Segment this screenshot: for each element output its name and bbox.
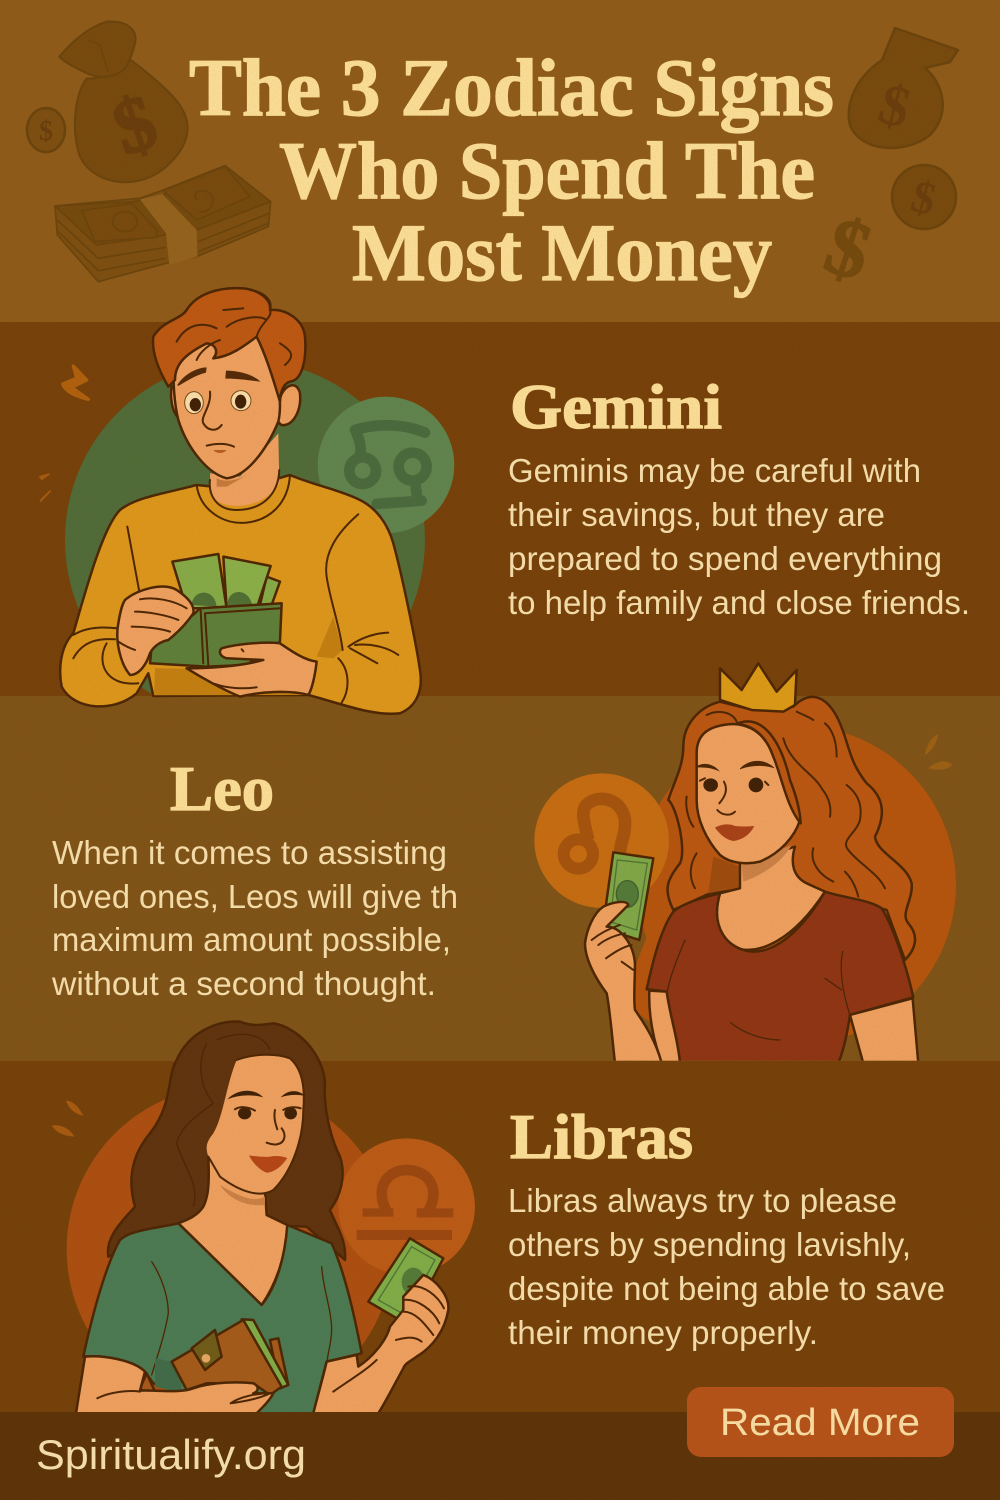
hair (153, 288, 305, 402)
line: Geminis may be careful with (508, 452, 921, 489)
lips (249, 1155, 287, 1173)
hair strands (177, 290, 291, 365)
hair strands (686, 712, 885, 897)
right arm (850, 998, 918, 1063)
panel: gemini (40, 288, 970, 720)
neck (210, 433, 279, 506)
footer brand: Spiritualify.org (36, 1431, 306, 1478)
icon: coin (892, 165, 956, 229)
neck and chest (178, 1158, 287, 1305)
libras text (508, 1182, 945, 1351)
title line 2: Who Spend The (279, 125, 815, 216)
collar (197, 470, 290, 523)
nose (267, 1110, 284, 1144)
icon: money bag (59, 21, 188, 182)
background doodles: money right (815, 28, 958, 298)
icon: money bag (849, 28, 958, 148)
right hand (187, 643, 317, 697)
line: without a second thought. (51, 965, 436, 1002)
hair (668, 697, 915, 960)
illustration: woman with wallet and bill (52, 1021, 475, 1413)
line: When it comes to assisting (52, 834, 447, 871)
left hand (117, 587, 194, 675)
icon: coin: $ (39, 116, 53, 147)
line: others by spending lavishly, (508, 1226, 911, 1263)
shadow behind neck (708, 857, 740, 893)
line: Libras always try to please (508, 1182, 897, 1219)
band: title (0, 0, 1000, 322)
nose (717, 782, 735, 815)
t-shirt (647, 892, 913, 1063)
left ear (171, 387, 180, 417)
badge: libra symbol (338, 1138, 475, 1275)
hand and forearm (585, 902, 662, 1063)
illustration: woman with crown and bill (534, 663, 956, 1063)
leo heading: Leo (170, 753, 274, 824)
face outline (208, 1055, 304, 1194)
brows (227, 1091, 305, 1099)
line: their money properly. (508, 1314, 818, 1351)
panel: libras (52, 1021, 945, 1413)
illustration: worried man with wallet (40, 288, 454, 720)
badge: cancer symbol (318, 397, 454, 533)
read more button: Read More (720, 1402, 920, 1444)
icon: dollar on coin: $ (906, 170, 942, 225)
panel: leo (51, 663, 956, 1063)
line: maximum amount possible, (52, 921, 451, 958)
band: gemini (0, 322, 1000, 696)
left fingers (118, 598, 187, 650)
dark orange behind shoulder (636, 938, 654, 1022)
sweater creases (73, 514, 398, 703)
title line 1: The 3 Zodiac Signs (189, 42, 834, 133)
orange circle backdrop (67, 1086, 393, 1413)
neck shadow (742, 845, 792, 882)
line: to help family and close friends. (508, 584, 970, 621)
sweater shadows (154, 617, 343, 695)
background doodles: money left (27, 21, 271, 282)
right arm and hand (313, 1275, 448, 1413)
fingers (592, 925, 633, 970)
sparks (925, 734, 952, 770)
icon: coin (27, 108, 65, 152)
line: prepared to spend everything (508, 540, 942, 577)
bill (368, 1238, 443, 1325)
read more button (687, 1387, 954, 1457)
title (189, 42, 834, 298)
sparks (63, 366, 88, 399)
line: loved ones, Leos will give th (52, 878, 458, 915)
leo text (51, 834, 458, 1002)
shirt creases (667, 940, 850, 1040)
v-neck shirt (83, 1223, 362, 1413)
title line 3: Most Money (352, 207, 772, 298)
footer band (0, 1412, 1000, 1500)
icon: stack of bills (55, 166, 271, 282)
brows (696, 761, 775, 772)
arm lines (97, 1391, 270, 1403)
green circle backdrop (65, 360, 425, 720)
neck and chest (717, 847, 825, 950)
fingers and arm lines (333, 1286, 444, 1392)
hair (108, 1021, 345, 1260)
hair over face (737, 721, 801, 823)
shirt creases (152, 1262, 332, 1375)
crown (720, 663, 797, 712)
bill (603, 852, 653, 940)
left arm (649, 991, 680, 1063)
icon: loose dollar: $ (815, 199, 882, 298)
sleeve shadow (155, 1358, 182, 1393)
brows (177, 367, 261, 386)
lips (715, 824, 754, 841)
gemini heading: Gemini (510, 371, 722, 442)
ear (278, 385, 300, 425)
hair strands (177, 1034, 270, 1207)
face (697, 724, 800, 863)
libras heading: Libras (510, 1101, 693, 1172)
wallet with bills (150, 554, 282, 667)
face (207, 1055, 304, 1194)
band: libras (0, 1061, 1000, 1412)
nose and mouth (203, 392, 234, 447)
orange circle backdrop (637, 726, 956, 1044)
icon: dollar on bag: $ (872, 70, 917, 141)
neck shadow (220, 1185, 265, 1205)
line: their savings, but they are (508, 496, 885, 533)
line: despite not being able to save (508, 1270, 945, 1307)
eyes (235, 1107, 301, 1119)
band: leo (0, 696, 1000, 1061)
sweater (60, 475, 421, 714)
left arm and hand (76, 1356, 273, 1413)
wallet (139, 1319, 288, 1395)
eyes (700, 778, 768, 792)
sparks (52, 1101, 83, 1137)
gemini text (508, 452, 970, 621)
icon: dollar on bag: $ (103, 77, 167, 172)
face (174, 337, 280, 478)
eyes (185, 391, 251, 414)
badge: leo symbol (534, 773, 669, 908)
